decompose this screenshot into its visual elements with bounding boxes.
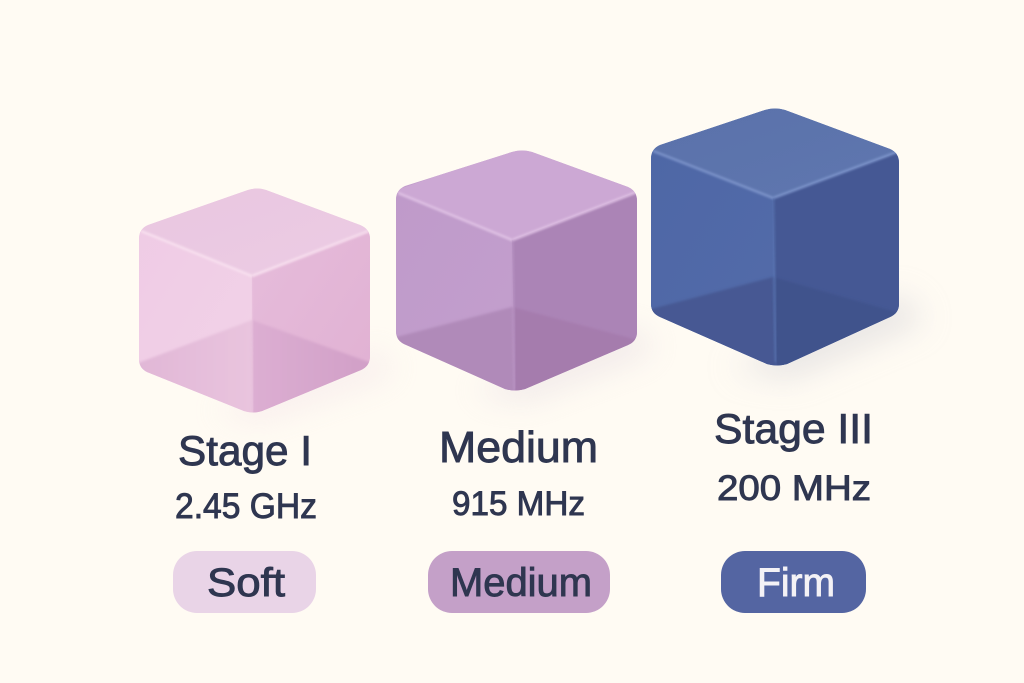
label: 2.45 GHz: 2.45 GHz: [175, 487, 317, 526]
cube 2: medium purple: [396, 150, 640, 399]
cube 1: soft pink: [139, 188, 370, 412]
pill: Medium: Medium: [450, 561, 592, 605]
cube 3: firm blue: [640, 100, 925, 378]
pill: Soft: Soft: [207, 561, 285, 605]
pill: Firm: Firm: [757, 561, 835, 605]
label: 915 MHz: 915 MHz: [452, 485, 585, 523]
label: Medium: Medium: [439, 423, 598, 472]
pill: Firm: [721, 551, 866, 613]
pill: Soft: [173, 551, 316, 613]
label: Stage III: Stage III: [714, 405, 873, 452]
label: 200 MHz: 200 MHz: [717, 469, 871, 508]
label: Stage I: Stage I: [178, 427, 312, 474]
pill: Medium: [428, 551, 610, 613]
